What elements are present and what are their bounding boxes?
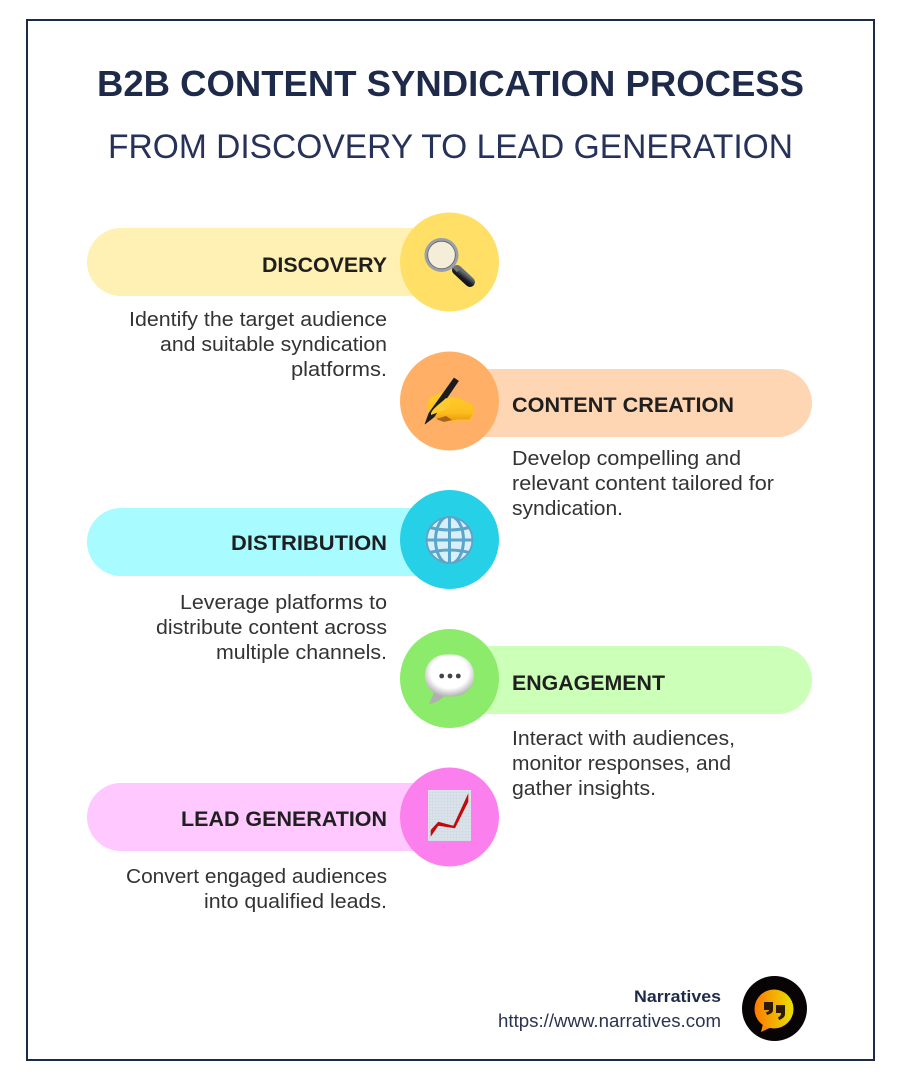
discovery description: platforms. — [291, 359, 387, 381]
discovery heading: DISCOVERY — [262, 254, 387, 277]
distribution pill — [87, 508, 450, 576]
panel: discovery — [87, 212, 499, 381]
lead generation description — [126, 866, 387, 913]
content creation description: relevant content tailored for — [512, 473, 774, 495]
content creation description — [512, 448, 774, 520]
distribution description: distribute content across — [156, 617, 387, 639]
panel: lead generation — [87, 768, 499, 913]
icon: narratives logo — [742, 976, 807, 1041]
discovery description: and suitable syndication — [160, 334, 387, 356]
footer url: https://www.narratives.com — [498, 1011, 721, 1031]
engagement description: gather insights. — [512, 778, 656, 800]
lead generation pill — [87, 783, 450, 851]
content creation circle — [400, 352, 499, 450]
lead generation circle — [400, 768, 499, 866]
engagement description — [512, 728, 735, 800]
lead generation heading: LEAD GENERATION — [181, 808, 387, 831]
panel: content creation — [400, 352, 812, 520]
distribution description — [156, 592, 387, 664]
engagement heading: ENGAGEMENT — [512, 672, 665, 695]
discovery circle — [400, 212, 499, 312]
panel: engagement — [400, 629, 812, 800]
footer brand name: Narratives — [634, 987, 721, 1006]
icon: magnifying glass — [426, 240, 470, 282]
title: B2B CONTENT SYNDICATION PROCESS — [97, 63, 804, 104]
distribution heading: DISTRIBUTION — [231, 532, 387, 555]
distribution circle — [400, 490, 499, 589]
engagement description: monitor responses, and — [512, 753, 731, 775]
discovery description — [129, 309, 387, 381]
icon: writing hand — [425, 378, 474, 424]
content creation description: Develop compelling and — [512, 448, 741, 470]
distribution description: Leverage platforms to — [180, 592, 387, 614]
lead generation description: into qualified leads. — [204, 891, 387, 913]
content creation description: syndication. — [512, 498, 623, 520]
engagement pill — [450, 646, 812, 714]
icon: speech bubble — [425, 654, 474, 704]
discovery description: Identify the target audience — [129, 309, 387, 331]
engagement description: Interact with audiences, — [512, 728, 735, 750]
engagement circle — [400, 629, 499, 728]
panel: distribution — [87, 490, 499, 664]
subtitle: FROM DISCOVERY TO LEAD GENERATION — [108, 128, 793, 166]
distribution description: multiple channels. — [216, 642, 387, 664]
icon: rising chart — [428, 790, 471, 841]
lead generation description: Convert engaged audiences — [126, 866, 387, 888]
content creation pill — [450, 369, 812, 437]
icon: globe — [425, 516, 474, 564]
discovery pill — [87, 228, 450, 296]
content creation heading: CONTENT CREATION — [512, 394, 734, 417]
